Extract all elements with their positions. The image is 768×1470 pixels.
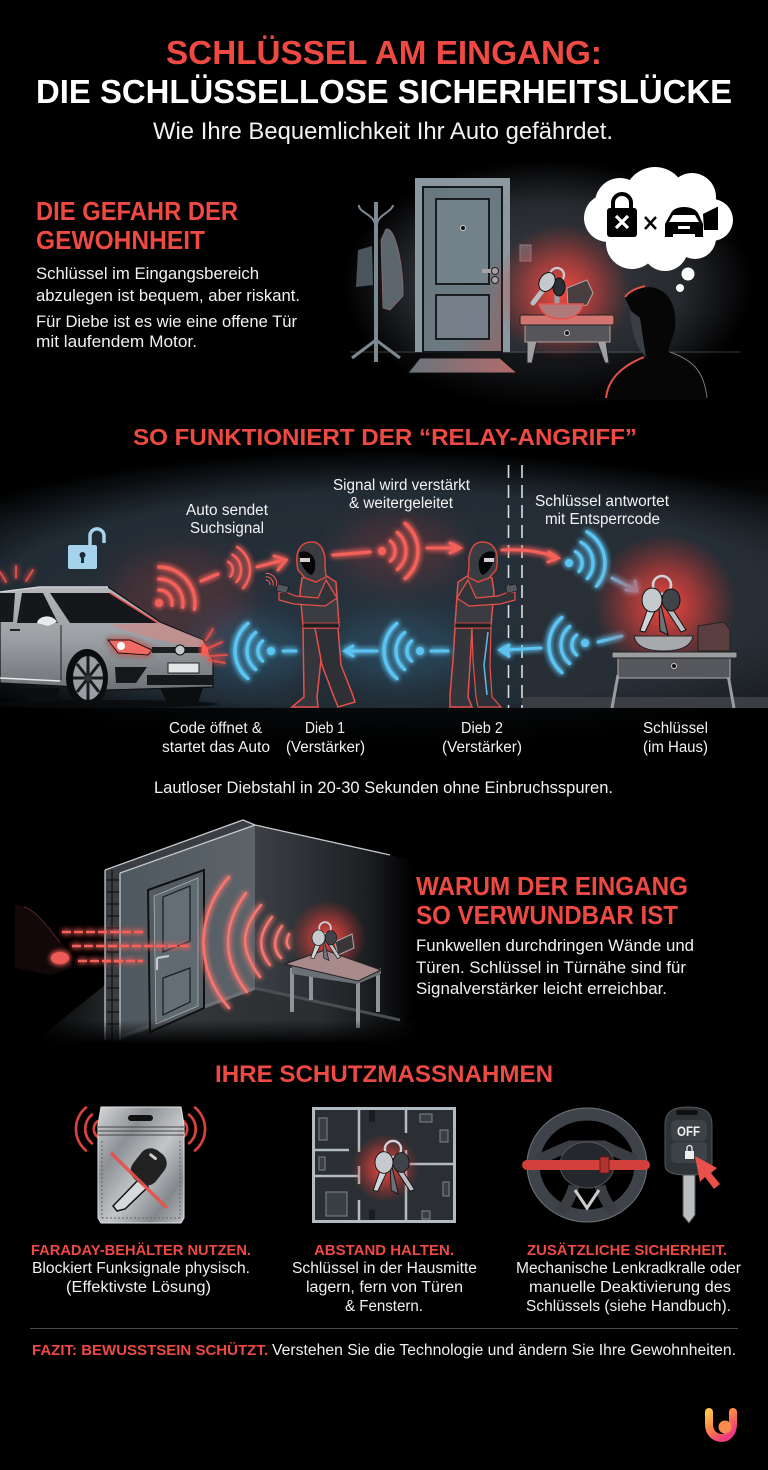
icon: car open door — [665, 207, 718, 237]
icon: open lock — [68, 529, 104, 569]
red radio waves — [204, 877, 289, 1008]
doormat — [408, 358, 517, 373]
panel: danger of habit text: Schlüssel im Eingangsbereich — [36, 264, 259, 283]
caption: distance: ABSTAND HALTEN. — [314, 1242, 454, 1259]
icon: multiply — [645, 217, 656, 229]
diagram labels: (Verstärker) — [286, 739, 365, 756]
panel: why the entrance is vulnerable: Funkwellen durchdringen Wände und — [416, 936, 694, 955]
small phone signal — [263, 571, 280, 589]
caption: faraday — [31, 1242, 251, 1296]
diagram labels: Signal wird verstärkt — [333, 477, 471, 494]
caption: faraday: Blockiert Funksignale physisch. — [32, 1260, 250, 1277]
logo — [709, 1412, 733, 1438]
red signal: thief 1 to thief 2 — [333, 523, 460, 579]
icon: faraday pouch — [76, 1107, 205, 1223]
blue signal: return from key to car — [235, 617, 622, 679]
heading: relay attack: SO FUNKTIONIERT DER “RELAY-ANGRIFF” — [133, 424, 637, 450]
door — [415, 178, 510, 352]
icon: floor plan — [312, 1107, 456, 1223]
property boundary dashed lines — [508, 465, 522, 708]
caption: extra security: Schlüssels (siehe Handbuch). — [526, 1298, 731, 1315]
icon: lock crossed — [607, 194, 637, 237]
light switch — [520, 245, 531, 261]
thief 1 — [276, 542, 355, 707]
diagram labels: Code öffnet & — [169, 720, 263, 737]
caption: faraday: (Effektivste Lösung) — [66, 1279, 211, 1296]
panel: why the entrance is vulnerable: Türen. Schlüssel in Türnähe sind für — [416, 958, 686, 977]
panel: danger of habit text: mit laufendem Motor. — [36, 332, 197, 351]
diagram labels: Suchsignal — [190, 520, 264, 537]
title: DIE SCHLÜSSELLOSE SICHERHEITSLÜCKE — [36, 73, 732, 110]
caption: distance — [292, 1242, 477, 1315]
thought bubble — [584, 167, 733, 292]
panel: danger of habit text: Für Diebe ist es wie eine offene Tür — [36, 312, 297, 331]
conclusion: FAZIT: BEWUSSTSEIN SCHÜTZT. — [32, 1342, 268, 1359]
note: silent theft: Lautloser Diebstahl in 20-30 Sekunden ohne Einbruchsspuren. — [154, 778, 613, 797]
illustration: hallway — [343, 160, 753, 410]
diagram labels — [162, 477, 708, 756]
key on table — [593, 533, 737, 708]
heading: protective measures: IHRE SCHUTZMASSNAHMEN — [215, 1061, 553, 1088]
diagram labels: Dieb 1 — [305, 720, 345, 737]
panel: why the entrance is vulnerable — [416, 871, 694, 998]
caption: extra security — [516, 1242, 741, 1315]
diagram labels: Dieb 2 — [461, 720, 503, 737]
diagram labels: Schlüssel — [643, 720, 708, 737]
relay attack diagram — [0, 450, 768, 770]
door — [148, 870, 204, 1032]
caption: extra security: Mechanische Lenkradkralle oder — [516, 1260, 741, 1277]
diagram labels: Auto sendet — [186, 502, 269, 519]
thief 2 — [450, 542, 518, 707]
caption: extra security: manuelle Deaktivierung des — [529, 1279, 731, 1296]
conclusion — [32, 1342, 736, 1359]
icon: steering wheel lock and key fob — [522, 1107, 720, 1223]
man from behind — [606, 286, 707, 400]
title: Wie Ihre Bequemlichkeit Ihr Auto gefährdet. — [153, 118, 613, 145]
panel: danger of habit text: abzulegen ist bequem, aber riskant. — [36, 286, 300, 305]
dashed red signals — [62, 932, 190, 961]
car — [0, 587, 218, 708]
table with bowl, keys and wallet — [520, 268, 614, 363]
panel: why the entrance is vulnerable: Signalverstärker leicht erreichbar. — [416, 979, 667, 998]
panel: danger of habit text: DIE GEFAHR DER — [36, 196, 238, 226]
icon: steering wheel lock and key fob: OFF — [677, 1123, 700, 1139]
caption: faraday: FARADAY-BEHÄLTER NUTZEN. — [31, 1242, 251, 1259]
illustration: wall with radio waves — [15, 820, 430, 1050]
diagram labels: Schlüssel antwortet — [535, 493, 670, 510]
diagram labels: (Verstärker) — [442, 739, 522, 756]
table with keys — [285, 900, 381, 1028]
car silhouette — [15, 905, 72, 975]
diagram labels: & weitergeleitet — [349, 495, 454, 512]
conclusion: Verstehen Sie die Technologie und ändern Sie Ihre Gewohnheiten. — [272, 1342, 736, 1359]
glow behind keys — [494, 224, 630, 360]
panel: danger of habit text: GEWOHNHEIT — [36, 225, 205, 255]
red signal: thief 2 to key — [502, 550, 558, 562]
diagram labels: startet das Auto — [162, 739, 270, 756]
panel: why the entrance is vulnerable: WARUM DER EINGANG — [416, 871, 688, 901]
caption: distance: & Fenstern. — [345, 1298, 423, 1315]
caption: distance: lagern, fern von Türen — [306, 1279, 463, 1296]
blue signal: to key — [566, 530, 637, 591]
title — [36, 34, 732, 145]
panel: danger of habit text — [36, 196, 300, 351]
caption: extra security: ZUSÄTZLICHE SICHERHEIT. — [527, 1242, 727, 1259]
red signal: car to thief 1 — [148, 546, 286, 619]
coat rack — [352, 202, 403, 362]
diagram labels: (im Haus) — [643, 739, 708, 756]
car alert sparks — [0, 566, 227, 663]
caption: distance: Schlüssel in der Hausmitte — [292, 1260, 477, 1277]
panel: why the entrance is vulnerable: SO VERWUNDBAR IST — [416, 900, 678, 930]
diagram labels: mit Entsperrcode — [545, 511, 660, 528]
title: SCHLÜSSEL AM EINGANG: — [166, 34, 602, 71]
